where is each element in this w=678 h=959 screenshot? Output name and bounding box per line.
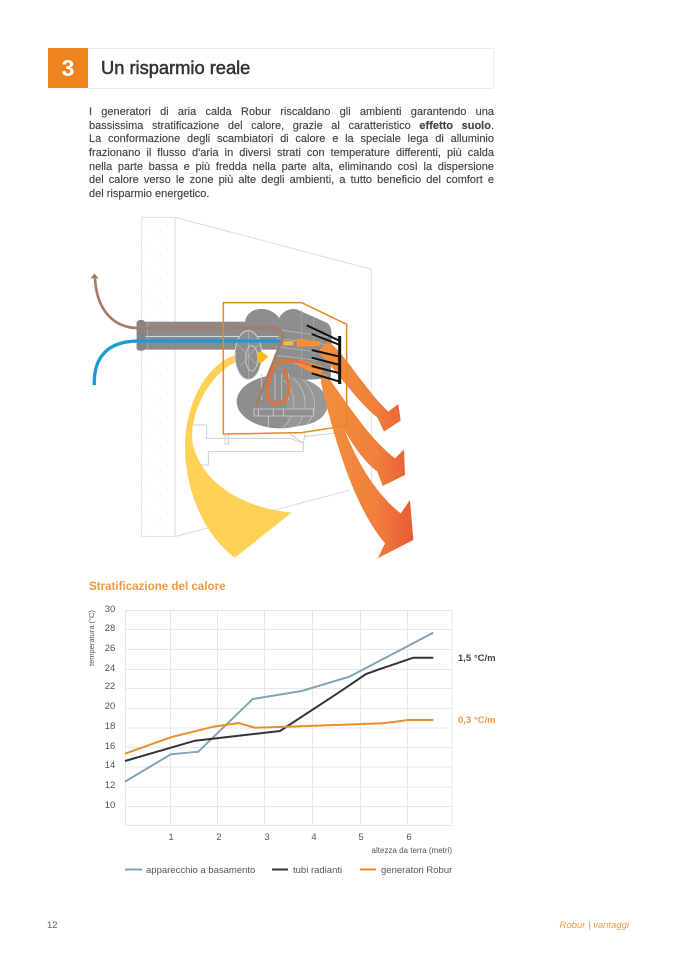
fan [235,331,262,379]
wall bracket [190,425,347,465]
section number [48,48,88,88]
series: apparecchio a basamento [125,633,433,782]
legend [125,865,452,876]
y axis labels: 22 [105,681,115,692]
intro text: bassissima stratificazione del calore, grazie al caratteristico effetto suolo. [89,120,494,132]
chart: temperature vs height [87,604,496,855]
legend: generatori Robur [381,865,452,876]
black fins [307,325,340,384]
hot air arrows [297,338,413,558]
y axis labels: 14 [105,760,115,771]
grid [125,610,452,826]
heading: Un risparmio reale [101,57,250,78]
intro text: del risparmio energetico. [89,188,209,200]
yellow cold air arrow [185,355,292,558]
intro text: I generatori di aria calda Robur riscaldano gli ambienti garantendo una [89,106,494,118]
y axis labels: 10 [105,800,115,811]
header box [48,48,494,89]
chart heading: Stratificazione del calore [89,580,226,593]
blue gas line [94,341,280,385]
section number: 3 [62,55,74,81]
y axis labels: 20 [105,701,115,712]
illustration: heater on wall [91,217,413,558]
wall [142,217,175,537]
series: generatori Robur [125,720,433,754]
brown flue line with arrow [91,273,282,407]
label 1,5 °C/m: 1,5 °C/m [458,653,496,664]
x axis labels: 5 [358,832,364,843]
y axis labels [105,604,115,811]
footer brand: Robur | vantaggi [559,920,629,931]
legend: tubi radianti [293,865,342,876]
series: tubi radianti [125,658,433,761]
orange burner coil [267,361,321,404]
x axis labels [168,832,412,843]
orange casing outline [223,303,347,434]
y axis title: temperatura (°C) [87,610,96,666]
intro text [89,106,494,200]
intro text: La conformazione degli scambiatori di calore e la speciale lega di alluminio [89,133,494,145]
room outline [175,217,372,537]
intro text: del calore verso le zone più alte degli ambienti, a tutto beneficio del comfort e [89,174,494,186]
y axis labels: 28 [105,623,115,634]
y axis labels: 18 [105,721,115,732]
x axis labels: 1 [168,832,174,843]
x axis labels: 2 [216,832,222,843]
pipes through wall [137,320,280,351]
heat exchanger [237,309,332,428]
x axis labels: 6 [406,832,412,843]
intro text: frazionano il flusso d'aria in diversi strati con temperature differenti, più calda [89,147,494,159]
x axis labels: 4 [311,832,317,843]
yellow intake arrow [258,352,268,363]
page number: 12 [47,920,58,931]
label 0,3 °C/m: 0,3 °C/m [458,715,496,726]
intro text: nella parte bassa e più fredda nella parte alta, eliminando così la dispersione [89,161,494,173]
y axis labels: 16 [105,741,115,752]
x axis labels: 3 [264,832,270,843]
title panel [88,48,494,89]
y axis labels: 30 [105,604,115,615]
y axis labels: 12 [105,780,115,791]
y axis labels: 26 [105,643,115,654]
legend: apparecchio a basamento [146,865,255,876]
x axis title: altezza da terra (metri) [372,846,452,855]
y axis labels: 24 [105,663,115,674]
